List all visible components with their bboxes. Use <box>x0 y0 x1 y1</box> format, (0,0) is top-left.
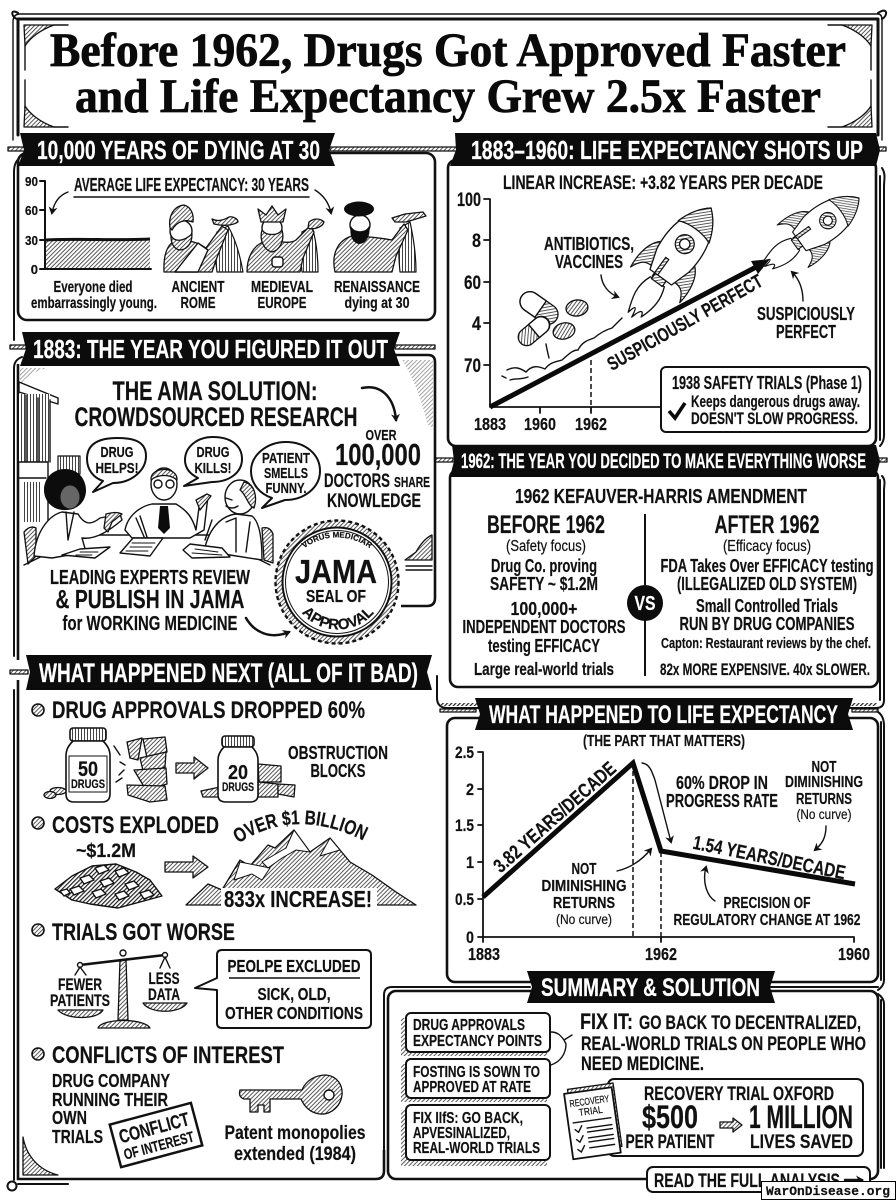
corner textures <box>20 360 433 428</box>
chart: flat life expectancy: 90 <box>25 174 38 189</box>
panel: what happened to life expectancy <box>447 698 878 982</box>
doctor: older man <box>204 480 262 560</box>
note: not diminishing returns, right: NOT <box>812 759 837 776</box>
chairs and table <box>24 527 273 565</box>
box: recovery trial oxford: RECOVERY TRIAL OXFORD <box>644 1084 834 1105</box>
caption: patent monopolies: Patent monopolies <box>224 1122 366 1144</box>
summary box 2: APPROVED AT RATE <box>413 1079 531 1096</box>
column: after 1962: Small Controlled Trials <box>696 596 838 616</box>
text: drug company running their own trials: OWN <box>52 1108 87 1128</box>
heading banner <box>18 133 335 166</box>
column: before 1962: BEFORE 1962 <box>487 511 605 539</box>
heading banner: 10,000 YEARS OF DYING AT 30 <box>37 135 320 165</box>
speech bubble: patient smells funny: PATIENT <box>262 450 310 467</box>
fix it text: NEED MEDICINE. <box>581 1054 704 1075</box>
label: antibiotics, vaccines: VACCINES <box>555 251 623 272</box>
label: renaissance: dying at 30 <box>344 295 410 312</box>
label: over $1 billion: OVER $1 BILLION <box>234 810 368 842</box>
stamp: conflict of interest: CONFLICT <box>117 1109 192 1148</box>
icon: JAMA seal of approval: APPROVAL <box>302 608 374 630</box>
stat: 100,000 doctors: OVER <box>366 428 397 444</box>
arrow to doctors count <box>362 387 396 420</box>
doctor: man with glasses <box>125 468 211 546</box>
box: recovery trial oxford: $500 <box>642 1099 698 1135</box>
chart caption: embarrassingly young. <box>31 295 157 312</box>
divider with VS badge: VS <box>634 593 656 615</box>
papers <box>62 538 230 558</box>
chart axes: 4 <box>472 314 481 335</box>
note: not diminishing returns, right: DIMINISHING <box>785 774 863 791</box>
callout: 60% drop <box>642 763 778 842</box>
note: not diminishing returns, right <box>785 759 863 850</box>
note: not diminishing returns, left: DIMINISHING <box>542 878 626 895</box>
callout: people excluded <box>195 950 371 1028</box>
summary box 3: REAL-WORLD TRIALS <box>413 1140 540 1157</box>
label: ancient Rome <box>172 279 225 312</box>
icon: scales: LESS <box>148 970 180 988</box>
heading banner: 1883: THE YEAR YOU FIGURED IT OUT <box>33 334 388 364</box>
label: medieval Europe: MEDIEVAL <box>251 279 313 296</box>
icon: mountain of money <box>186 830 416 912</box>
item: drug approvals dropped: DRUG APPROVALS DROPPED 60% <box>52 697 365 724</box>
label: antibiotics, vaccines <box>544 233 634 297</box>
icon: scales <box>50 950 187 1028</box>
axes: 2.5 <box>455 743 474 762</box>
column: before 1962 <box>462 511 626 679</box>
title: and Life Expectancy Grew 2.5x Faster <box>75 70 821 123</box>
item: drug approvals dropped <box>32 697 388 802</box>
caption: leading experts: & PUBLISH IN JAMA <box>56 586 244 614</box>
icon: check mark <box>669 403 685 418</box>
panel: 1962 the year you decided <box>450 445 880 687</box>
axes: 0 <box>466 928 474 947</box>
icon: arrow <box>176 757 208 779</box>
heading: the AMA solution <box>74 376 358 432</box>
speech bubble: drug helps: DRUG <box>100 444 134 461</box>
label: 833x increase: 833x INCREASE! <box>224 886 372 912</box>
icon: JAMA seal of approval: VORUS MEDICIAR <box>301 532 372 548</box>
trend arrow <box>490 259 770 407</box>
axes: 1883 <box>468 944 500 964</box>
icon: ancient Roman <box>164 205 243 272</box>
icon: recovery trial document <box>564 1083 623 1159</box>
label: ancient Rome: ANCIENT <box>172 279 225 296</box>
icon: scales: DATA <box>148 986 180 1004</box>
label: suspiciously perfect <box>757 272 855 342</box>
speech bubble: drug helps: HELPS! <box>96 460 138 477</box>
chart axes: 60 <box>464 273 481 294</box>
icon: arrow <box>165 856 208 878</box>
label: obstruction blocks: OBSTRUCTION <box>288 742 388 763</box>
panel: life expectancy shots up <box>448 133 880 446</box>
chart: flat life expectancy: 0 <box>31 262 38 277</box>
fix it text: FIX IT: <box>580 1009 633 1034</box>
icon: pile of cash <box>55 864 162 908</box>
stat: 100,000 doctors: SHARE <box>394 474 430 491</box>
axes: 1 <box>466 853 474 872</box>
icon: bottle of 20 drugs: 20 <box>228 762 248 784</box>
summary box 1: DRUG APPROVALS <box>413 1017 525 1034</box>
summary box 3: FIX IIfS: GO BACK, <box>413 1110 523 1127</box>
column: after 1962: AFTER 1962 <box>714 511 820 539</box>
icon: bottle of 20 drugs <box>201 736 295 802</box>
panel subtitle: 1962 KEFAUVER-HARRIS AMENDMENT <box>515 486 807 508</box>
item: trials got worse <box>32 919 371 1028</box>
panel: what happened next <box>16 655 432 1180</box>
text: drug company running their own trials <box>52 1071 170 1147</box>
column: before 1962: Large real-world trials <box>474 659 614 679</box>
data line <box>483 763 855 897</box>
box: recovery trial oxford <box>608 1079 863 1156</box>
speech bubble: patient smells funny: FUNNY. <box>266 480 306 497</box>
callout: people excluded: PEOLPE EXCLUDED <box>228 956 360 976</box>
note: precision of regulatory change: PRECISION OF <box>724 895 811 912</box>
heading banner <box>26 655 432 690</box>
icon: recovery trial document: RECOVERY <box>569 1094 610 1110</box>
icon: bottle of 50 drugs: 50 <box>78 758 98 781</box>
column: before 1962: SAFETY ~ $1.2M <box>490 574 598 594</box>
callout: 60% drop: PROGRESS RATE <box>666 791 778 811</box>
column: after 1962: (Efficacy focus) <box>723 538 811 555</box>
item: conflicts of interest: CONFLICTS OF INTEREST <box>52 1042 284 1069</box>
axes: 1962 <box>645 944 677 964</box>
title corner ornaments <box>24 25 872 127</box>
icon: bottle of 50 drugs <box>44 728 110 802</box>
divider with VS badge <box>627 514 663 676</box>
heading banner <box>450 445 880 477</box>
icon: scales: FEWER <box>58 976 102 994</box>
icon: JAMA seal of approval <box>274 519 400 645</box>
item: trials got worse: TRIALS GOT WORSE <box>52 919 235 946</box>
icon: scales: PATIENTS <box>50 992 110 1010</box>
caption: patent monopolies <box>224 1122 366 1165</box>
chart caption: Everyone died <box>54 279 132 296</box>
label: obstruction blocks: BLOCKS <box>310 760 366 781</box>
label: suspiciously perfect: PERFECT <box>776 321 836 342</box>
speech bubble: drug kills <box>184 437 242 486</box>
label: obstruction blocks <box>288 742 388 781</box>
speech bubble: drug kills: DRUG <box>196 444 230 461</box>
speech bubble: patient smells funny: SMELLS <box>264 465 308 482</box>
icon: renaissance man <box>334 202 426 272</box>
icon: recovery trial document: TRIAL <box>578 1105 604 1119</box>
callout: 60% drop: 60% DROP IN <box>676 773 768 793</box>
summary box 2 <box>401 1059 550 1102</box>
stat: 100,000 doctors <box>324 428 430 512</box>
axes: 1.5 <box>455 816 474 835</box>
box: recovery trial oxford: PER PATIENT <box>626 1132 715 1153</box>
icon: key <box>240 1075 342 1114</box>
heading banner <box>20 332 400 366</box>
line chart <box>455 743 870 964</box>
column: before 1962: Drug Co. proving <box>491 556 597 576</box>
label: medieval Europe: EUROPE <box>258 295 307 312</box>
chart: flat life expectancy <box>25 174 151 277</box>
summary box 1 <box>401 1013 550 1056</box>
chart axes: 8 <box>472 231 481 252</box>
doctor: woman <box>34 469 122 558</box>
column: before 1962: 100,000+ <box>510 599 578 619</box>
chart subtitle: (THE PART THAT MATTERS) <box>583 733 745 750</box>
icon: bottle of 50 drugs: DRUGS <box>71 777 105 791</box>
summary box 3: APVESINALIZED, <box>413 1125 510 1142</box>
note: not diminishing returns, left: (No curve) <box>556 911 612 927</box>
callout: people excluded: OTHER CONDITIONS <box>225 1003 363 1023</box>
icon: rocket 1 <box>607 190 736 335</box>
chart heading: average life expectancy: AVERAGE LIFE EXPECTANCY: 30 YEARS <box>74 174 309 195</box>
corner ornament <box>23 1137 58 1175</box>
note: not diminishing returns, left: RETURNS <box>553 895 615 912</box>
speech bubble: drug kills: KILLS! <box>194 460 232 477</box>
heading banner <box>527 971 775 1003</box>
text: drug company running their own trials: RUNNING THEIR <box>52 1090 168 1110</box>
label on trend line: SUSPICIOUSLY PERFECT <box>604 271 767 375</box>
panel: 10,000 years of dying at 30 <box>18 133 435 320</box>
summary box 3 <box>401 1105 550 1166</box>
chart axes <box>457 190 662 434</box>
caption: leading experts: for WORKING MEDICINE <box>62 613 238 635</box>
column: before 1962: testing EFFICACY <box>488 636 600 656</box>
slope label: 3.82: 3.82 YEARS/DECADE <box>489 758 621 877</box>
note: not diminishing returns, right: RETURNS <box>796 791 852 808</box>
smoke trail <box>502 318 622 380</box>
illustration: library building <box>19 382 80 530</box>
title <box>24 24 872 127</box>
box: recovery trial oxford: LIVES SAVED <box>750 1132 853 1153</box>
axes: 1960 <box>838 944 870 964</box>
icon: medieval king <box>247 206 324 272</box>
label: ancient Rome: ROME <box>180 295 216 312</box>
illustration: three doctors at a table <box>24 468 273 565</box>
label: small cost: ~$1.2M <box>76 841 136 862</box>
heading: the AMA solution: THE AMA SOLUTION: <box>112 376 318 406</box>
speech bubble: drug helps <box>87 438 146 492</box>
slope label: 1.54: 1.54 YEARS/DECADE <box>691 832 847 884</box>
note: not diminishing returns, left: NOT <box>572 861 597 878</box>
chart axes: 100 <box>457 190 481 211</box>
chart: flat life expectancy: 60 <box>25 203 38 218</box>
chart axes: 1962 <box>575 414 607 434</box>
icon: pills <box>515 288 589 358</box>
text: drug company running their own trials: DRUG COMPANY <box>52 1071 170 1091</box>
connector arrow <box>551 1032 572 1065</box>
chart heading: average life expectancy <box>52 174 331 213</box>
icon: JAMA seal of approval: JAMA <box>295 553 377 590</box>
icon: bottle of 20 drugs: DRUGS <box>222 782 254 794</box>
title: Before 1962, Drugs Got Approved Faster <box>50 24 846 77</box>
caption: leading experts: LEADING EXPERTS REVIEW <box>50 567 250 589</box>
icon: JAMA seal of approval: SEAL OF <box>306 586 366 606</box>
summary box 2: FOSTING IS SOWN TO <box>413 1064 540 1081</box>
label: renaissance <box>334 279 420 312</box>
label: antibiotics, vaccines: ANTIBIOTICS, <box>544 233 634 254</box>
label: renaissance: RENAISSANCE <box>334 279 420 296</box>
column: before 1962: (Safety focus) <box>506 538 586 555</box>
column: after 1962 <box>660 511 874 679</box>
axes: 2 <box>466 780 474 799</box>
stat: 100,000 doctors: KNOWLEDGE <box>327 491 421 512</box>
caption: patent monopolies: extended (1984) <box>234 1143 356 1165</box>
summary box 1: EXPECTANCY POINTS <box>413 1033 542 1050</box>
illustration: domed building <box>405 535 432 570</box>
callout: 1938 safety trials <box>661 367 870 432</box>
axes <box>455 743 870 964</box>
label: suspiciously perfect: SUSPICIOUSLY <box>757 303 855 324</box>
chart: flat life expectancy: 30 <box>25 233 38 248</box>
stamp: conflict of interest: OF INTEREST <box>122 1129 196 1164</box>
chart axes: 1960 <box>524 414 556 434</box>
stat: 100,000 doctors: DOCTORS <box>324 471 390 492</box>
icon: crumbling blocks <box>114 737 167 802</box>
panel: 1883 the year you figured it out <box>16 332 436 660</box>
watermark: WarOnDisease.org <box>766 1184 890 1199</box>
heading banner: WHAT HAPPENED NEXT (ALL OF IT BAD) <box>39 658 418 688</box>
text: drug company running their own trials: TRIALS <box>52 1127 103 1147</box>
chart axes: 70 <box>464 356 481 377</box>
heading banner: SUMMARY & SOLUTION <box>541 974 760 1002</box>
icon: rocket 2 <box>749 176 875 288</box>
label: medieval Europe <box>251 279 313 312</box>
item: costs exploded: COSTS EXPLODED <box>52 812 219 839</box>
fix it text <box>580 1009 866 1075</box>
column: before 1962: INDEPENDENT DOCTORS <box>462 617 626 637</box>
heading: the AMA solution: CROWDSOURCED RESEARCH <box>74 402 358 432</box>
stat: 100,000 doctors: 100,000 <box>335 437 421 472</box>
chart axes: 1883 <box>474 414 506 434</box>
speech bubble: patient smells funny <box>251 442 320 508</box>
icon: arrow <box>720 1118 742 1132</box>
stamp: conflict of interest <box>110 1103 202 1167</box>
chart caption <box>31 279 157 312</box>
note: not diminishing returns, right: (No curve) <box>796 806 852 822</box>
panel: summary and solution <box>384 971 878 1192</box>
item: conflicts of interest <box>32 1042 366 1167</box>
note: precision of regulatory change <box>674 867 861 929</box>
item: costs exploded <box>31 810 417 912</box>
axes: 0.5 <box>455 890 474 909</box>
callout: people excluded: SICK, OLD, <box>258 984 330 1004</box>
caption: leading experts <box>50 567 250 635</box>
arrow to seal <box>246 618 289 635</box>
note: not diminishing returns, left <box>542 849 651 927</box>
